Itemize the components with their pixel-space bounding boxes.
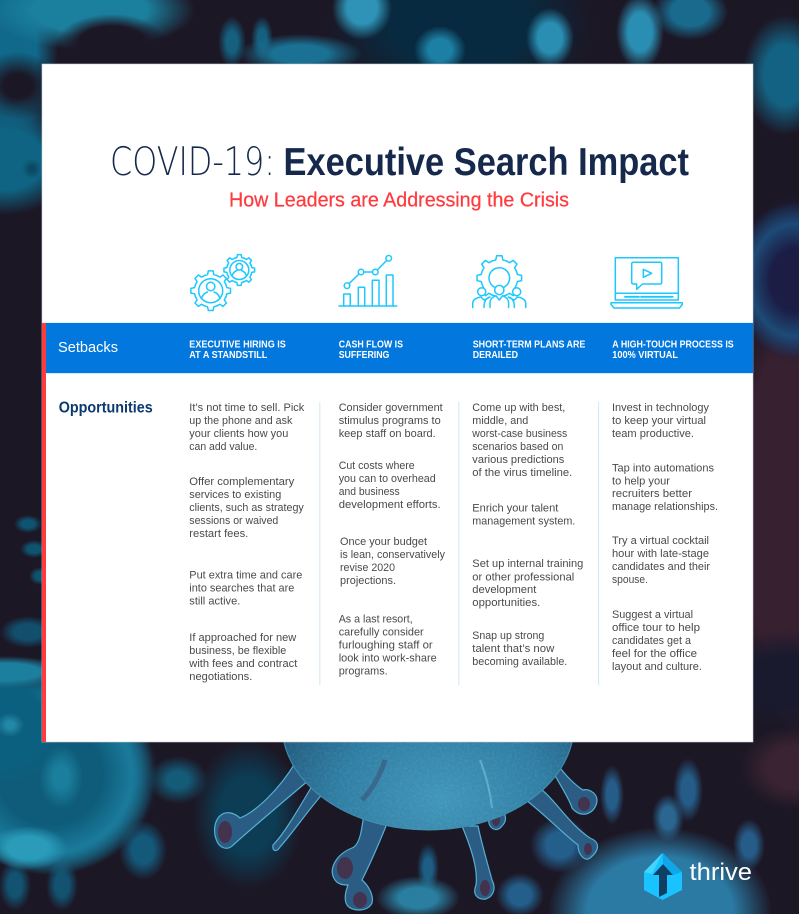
setbacks band bbox=[42, 322, 753, 374]
logo: thrive bbox=[644, 853, 752, 900]
paragraph: scenarios based on bbox=[472, 441, 563, 453]
paragraph: or other professional bbox=[472, 571, 574, 583]
icon: team gear bbox=[473, 256, 526, 308]
paragraph: keep staff on board. bbox=[339, 428, 436, 440]
paragraph: Consider government bbox=[339, 402, 444, 414]
paragraph: worst-case business bbox=[471, 428, 568, 440]
paragraph: with fees and contract bbox=[188, 658, 298, 670]
paragraph: restart fees. bbox=[189, 528, 248, 540]
paragraph bbox=[188, 632, 298, 683]
paragraph: Cut costs where bbox=[339, 460, 415, 472]
paragraph: Tap into automations bbox=[612, 462, 714, 474]
paragraph: business, be flexible bbox=[189, 645, 286, 657]
white card bbox=[42, 64, 753, 742]
subtitle: How Leaders are Addressing the Crisis bbox=[229, 190, 569, 212]
paragraph: layout and culture. bbox=[612, 661, 702, 673]
setback: virtual process: A HIGH-TOUCH PROCESS IS bbox=[612, 339, 734, 350]
setback: executive hiring bbox=[189, 339, 286, 361]
paragraph: feel for the office bbox=[612, 648, 697, 660]
paragraph: office tour to help bbox=[612, 622, 700, 634]
paragraph: middle, and bbox=[472, 415, 528, 427]
paragraph: of the virus timeline. bbox=[472, 467, 572, 479]
paragraph bbox=[472, 630, 567, 668]
setback: virtual process: 100% VIRTUAL bbox=[612, 350, 678, 361]
paragraph: negotiations. bbox=[189, 671, 252, 683]
red accent stripe bbox=[42, 323, 46, 742]
icon: laptop video bbox=[611, 258, 682, 308]
paragraph: can add value. bbox=[189, 441, 257, 453]
icon: people gears bbox=[191, 255, 255, 310]
setback: cash flow bbox=[339, 339, 403, 361]
paragraph: recruiters better bbox=[612, 488, 692, 500]
paragraph: projections. bbox=[340, 575, 396, 587]
paragraph bbox=[472, 558, 583, 609]
paragraph: development bbox=[472, 584, 537, 596]
paragraph: Enrich your talent bbox=[472, 503, 559, 515]
paragraph: management system. bbox=[472, 516, 575, 528]
paragraph: stimulus programs to bbox=[339, 415, 441, 427]
paragraph: manage relationships. bbox=[612, 501, 718, 513]
paragraph: Invest in technology bbox=[612, 402, 709, 414]
paragraph: development efforts. bbox=[339, 499, 441, 511]
paragraph: into searches that are bbox=[189, 583, 294, 595]
paragraph: As a last resort, bbox=[339, 614, 413, 626]
paragraph: to keep your virtual bbox=[612, 415, 706, 427]
paragraph: clients, such as strategy bbox=[189, 502, 304, 514]
paragraph bbox=[339, 402, 444, 440]
paragraph: It’s not time to sell. Pick bbox=[189, 402, 305, 414]
paragraph: your clients how you bbox=[189, 428, 288, 440]
setback: short-term plans: SHORT-TERM PLANS ARE bbox=[473, 339, 586, 350]
paragraph bbox=[189, 570, 302, 608]
paragraph: candidates get a bbox=[612, 635, 692, 647]
icon: growth chart bbox=[339, 255, 397, 306]
paragraph: Suggest a virtual bbox=[612, 609, 693, 621]
column 2 text bbox=[339, 402, 445, 678]
paragraph: up the phone and ask bbox=[189, 415, 293, 427]
title: COVID-19: bbox=[110, 140, 275, 185]
paragraph: to help your bbox=[612, 475, 670, 487]
paragraph bbox=[612, 535, 710, 586]
paragraph: Once your budget bbox=[340, 536, 428, 548]
paragraph bbox=[472, 503, 575, 528]
setback: short-term plans bbox=[473, 339, 586, 361]
paragraph bbox=[340, 536, 445, 587]
paragraph bbox=[339, 460, 441, 511]
paragraph: still active. bbox=[189, 596, 240, 608]
paragraph: Come up with best, bbox=[472, 402, 565, 414]
logo: thrive: thrive bbox=[690, 859, 752, 886]
paragraph: is lean, conservatively bbox=[340, 549, 445, 561]
label: opportunities: Opportunities bbox=[59, 400, 153, 416]
paragraph: becoming available. bbox=[472, 656, 567, 668]
paragraph: team productive. bbox=[612, 428, 694, 440]
paragraph bbox=[189, 476, 304, 540]
setback: cash flow: SUFFERING bbox=[339, 350, 390, 361]
main virus illustration bbox=[215, 620, 598, 910]
paragraph: Snap up strong bbox=[472, 630, 544, 642]
paragraph: Offer complementary bbox=[189, 476, 295, 488]
paragraph bbox=[189, 402, 305, 453]
paragraph: carefully consider bbox=[339, 627, 424, 639]
paragraph: and business bbox=[339, 486, 400, 498]
paragraph: Put extra time and care bbox=[189, 570, 302, 582]
setback: cash flow: CASH FLOW IS bbox=[339, 339, 403, 350]
paragraph: opportunities. bbox=[472, 597, 540, 609]
column 4 text bbox=[612, 402, 718, 673]
setback: executive hiring: AT A STANDSTILL bbox=[189, 350, 267, 361]
paragraph: spouse. bbox=[612, 574, 648, 586]
paragraph: candidates and their bbox=[612, 561, 710, 573]
title: Executive Search Impact bbox=[284, 141, 689, 184]
paragraph: talent that’s now bbox=[472, 643, 555, 655]
paragraph bbox=[612, 462, 718, 513]
paragraph: services to existing bbox=[189, 489, 281, 501]
paragraph bbox=[612, 402, 709, 440]
paragraph: you can to overhead bbox=[339, 473, 436, 485]
paragraph: various predictions bbox=[472, 454, 565, 466]
setback: short-term plans: DERAILED bbox=[473, 350, 518, 361]
paragraph: hour with late-stage bbox=[612, 548, 709, 560]
column 3 text bbox=[471, 402, 583, 668]
label: setbacks: Setbacks bbox=[58, 339, 118, 356]
paragraph: sessions or waived bbox=[189, 515, 278, 527]
setback: virtual process bbox=[612, 339, 734, 361]
paragraph bbox=[612, 609, 702, 673]
paragraph: If approached for new bbox=[189, 632, 297, 644]
paragraph bbox=[339, 614, 437, 678]
paragraph: Set up internal training bbox=[472, 558, 583, 570]
column 1 text bbox=[188, 402, 305, 683]
paragraph: furloughing staff or bbox=[339, 640, 433, 652]
paragraph bbox=[471, 402, 572, 479]
setback: executive hiring: EXECUTIVE HIRING IS bbox=[189, 339, 286, 350]
title bbox=[110, 140, 689, 185]
paragraph: Try a virtual cocktail bbox=[612, 535, 709, 547]
paragraph: programs. bbox=[339, 666, 388, 678]
paragraph: revise 2020 bbox=[340, 562, 395, 574]
paragraph: look into work-share bbox=[339, 653, 437, 665]
